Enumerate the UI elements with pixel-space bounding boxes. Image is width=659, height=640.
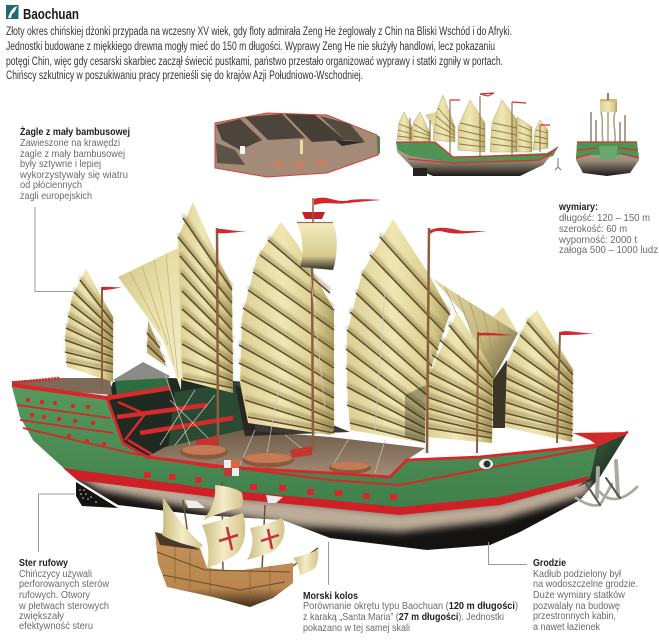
callout: bulkheads: [533, 557, 638, 633]
fore sail: [427, 312, 493, 443]
stern sail: [65, 269, 113, 382]
triangular sail: [118, 248, 183, 390]
boats: [180, 436, 371, 474]
caravel masts: [183, 482, 318, 575]
deck: [147, 430, 425, 477]
callout: rudder: efektywność steru: [19, 620, 93, 632]
checker flags: [224, 460, 239, 476]
caravel Santa Maria: [155, 482, 318, 607]
callout: bulkheads: Duże wymiary statków: [533, 589, 625, 601]
callout: rudder: rufowych. Otwory: [19, 589, 91, 601]
callout: bamboo sails: [19, 125, 130, 202]
callout: bamboo sails: żagli europejskich: [20, 190, 92, 202]
callout: size comparison: [303, 590, 518, 634]
rigging: [160, 270, 385, 473]
callout: rudder: Chińczycy używali: [19, 568, 92, 580]
front view of ship: [576, 93, 639, 176]
specification: wymiary: długość: 120 – 150 m: [559, 212, 650, 224]
callout: bamboo sails: Żagle z mały bambusowej: [20, 125, 130, 138]
green hull: [12, 378, 628, 515]
icon: rudder: [76, 482, 118, 508]
callout: size comparison: Porównanie okrętu typu Baochuan (120 m długości): [303, 600, 518, 612]
callout: rudder: w płetwach sterowych: [18, 600, 109, 612]
callout: size comparison: Morski kolos: [303, 590, 358, 602]
big sail: [346, 219, 450, 443]
caravel flags: [185, 500, 205, 508]
intro text block: Chińscy szkutnicy w poszukiwaniu pracy przenieśli się do krajów Azji Południowo-Wschodniej.: [6, 70, 363, 82]
sail 3: [178, 202, 233, 393]
crosses: [219, 527, 279, 550]
callout: rudder: perforowanych sterów: [19, 578, 109, 590]
specification: wymiary: szerokość: 60 m: [559, 223, 627, 235]
shadow behind sails: [235, 385, 350, 436]
stern crenellation: [12, 378, 60, 383]
sail 4: [239, 222, 334, 435]
callout: bamboo sails: wykorzystywały się wiatru: [19, 169, 128, 181]
icon: eye: [479, 459, 493, 469]
leader: size comparison: [328, 542, 330, 585]
rear sails: [147, 278, 518, 428]
callout: bulkheads: pozwalały na budowę: [533, 600, 620, 612]
top view of ship: [215, 113, 380, 177]
hull bottom: [33, 440, 600, 550]
callout: rudder: zwiększały: [19, 610, 65, 622]
flags: [102, 198, 598, 336]
callout: bulkheads: a nawet łazienek: [533, 621, 601, 633]
leader: bulkheads: [488, 542, 527, 564]
specification: wymiary: wyporność: 2000 t: [558, 234, 637, 246]
callout: size comparison: z karaką „Santa Maria” (27 m długości). Jednostki: [303, 611, 504, 623]
main ship: [12, 198, 637, 550]
callout: rudder: Ster rufowy: [19, 557, 68, 569]
superstructure: [12, 362, 255, 458]
leader: rudder: [38, 494, 75, 552]
callout: bamboo sails: były sztywne i lepiej: [20, 158, 101, 170]
specification: wymiary: wymiary:: [558, 201, 598, 213]
caravel hull: [155, 532, 293, 607]
callout: bulkheads: Kadłub podzielony był: [533, 568, 622, 580]
icon: logo: [6, 5, 18, 19]
bow sail: [505, 310, 573, 442]
callout: rudder: [18, 557, 109, 632]
callout: bulkheads: przestronnych kabin,: [533, 610, 616, 622]
callout: bamboo sails: od płóciennych: [20, 179, 82, 191]
title: Baochuan: [23, 6, 79, 23]
specification: wymiary: [558, 201, 658, 256]
anchors: [576, 461, 637, 506]
callout: bamboo sails: Zawieszone na krawędzi: [20, 137, 120, 149]
mid top sail: [297, 212, 337, 270]
callout: bulkheads: Grodzie: [533, 557, 566, 569]
leader: sails: [35, 207, 73, 292]
callout: bamboo sails: żagle z mały bambusowej: [20, 148, 125, 160]
caravel sails: [162, 497, 203, 548]
intro text block: [6, 26, 512, 82]
callout: bulkheads: na wodoszczelne grodzie.: [533, 578, 638, 590]
masts: [102, 198, 560, 453]
intro text block: Jednostki budowane z miękkiego drewna mogły mieć do 150 m długości. Wyprawy Zeng He nie służyły handlowi, lecz pokazaniu: [6, 41, 495, 53]
callout: size comparison: pokazano w tej samej skali: [303, 622, 410, 634]
intro text block: potęgi Chin, więc gdy cesarski skarbiec zaczął świecić pustkami, państwo przestało organizować wyprawy i statki zgniły w portach.: [6, 56, 503, 68]
side view of ship: [396, 93, 561, 176]
